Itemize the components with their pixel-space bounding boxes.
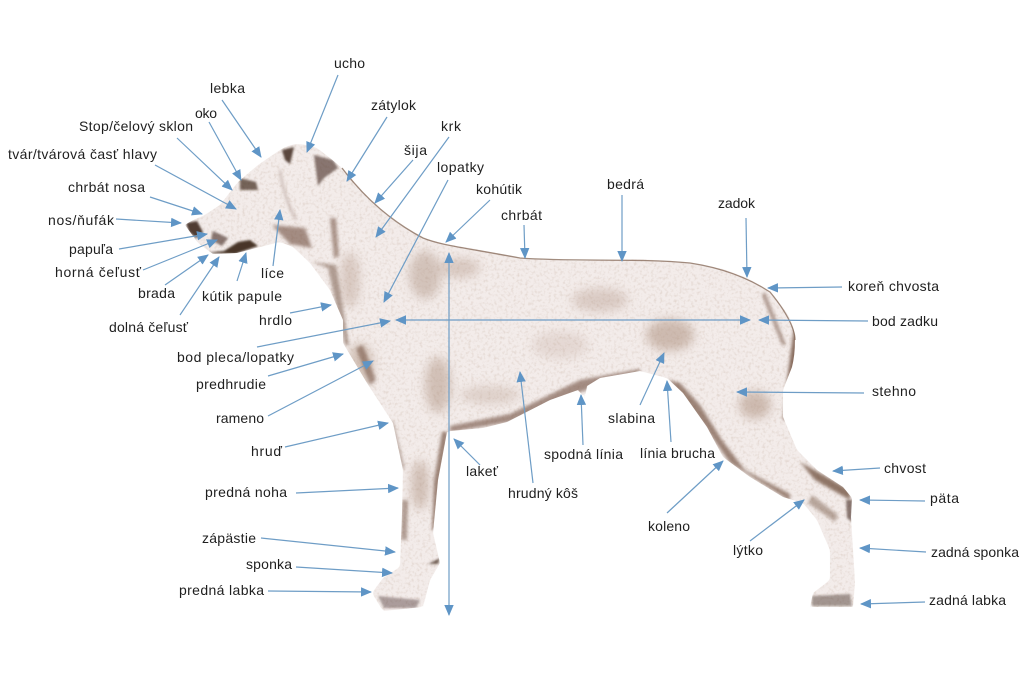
label: Stop/čelový sklon: Stop/čelový sklon — [79, 118, 193, 134]
label: Stop/čelový sklon — [79, 118, 232, 190]
label: zadná labka: zadná labka — [929, 592, 1006, 608]
label: stehno: stehno — [872, 383, 916, 399]
label: tvár/tvárová časť hlavy — [8, 146, 236, 209]
label: brada — [138, 255, 208, 301]
label: bedrá — [607, 176, 644, 261]
label: líce — [261, 210, 284, 281]
label: šija — [375, 142, 427, 203]
label: dolná čeľusť — [109, 257, 219, 335]
label: predná noha — [205, 484, 398, 500]
label: spodná línia — [544, 395, 623, 462]
label: predná labka: predná labka — [179, 582, 264, 598]
label: zátylok: zátylok — [371, 97, 417, 113]
label: dolná čeľusť: dolná čeľusť — [109, 319, 189, 335]
label: koreň chvosta: koreň chvosta — [848, 278, 939, 294]
label: slabina — [608, 353, 664, 426]
label: brada: brada — [138, 285, 175, 301]
label: nos/ňufák: nos/ňufák — [48, 212, 115, 228]
label: bod pleca/lopatky: bod pleca/lopatky — [177, 349, 294, 365]
label: rameno — [216, 361, 373, 426]
dog illustration — [170, 130, 870, 620]
label: chvost — [833, 460, 926, 476]
label: kútik papule — [202, 253, 282, 304]
label: hrudný kôš — [508, 372, 578, 501]
label: päta — [860, 490, 959, 506]
label: ucho — [307, 55, 365, 152]
label: zápästie: zápästie — [202, 530, 256, 546]
label: lýtko: lýtko — [733, 542, 763, 558]
label: bod zadku: bod zadku — [872, 313, 938, 329]
label: oko: oko — [195, 105, 217, 121]
label: lebka — [210, 80, 261, 157]
label: nos/ňufák — [48, 212, 181, 228]
label: zátylok — [347, 97, 417, 181]
label: papuľa: papuľa — [69, 241, 113, 257]
label: lakeť: lakeť — [466, 463, 499, 479]
label: hruď: hruď — [251, 443, 282, 459]
label: predhrudie — [196, 354, 343, 392]
back outline — [342, 168, 795, 340]
arrow: body length — [396, 319, 750, 321]
label: kútik papule: kútik papule — [202, 288, 282, 304]
label: hruď — [251, 423, 388, 459]
label: slabina: slabina — [608, 410, 655, 426]
label: spodná línia: spodná línia — [544, 446, 623, 462]
label: lopatky — [384, 159, 484, 302]
label: kohútik — [446, 181, 523, 242]
label: lopatky: lopatky — [437, 159, 484, 175]
label: zadok — [718, 195, 756, 277]
label: päta: päta — [930, 490, 959, 506]
label: rameno: rameno — [216, 410, 264, 426]
label: horná čeľusť: horná čeľusť — [55, 264, 142, 280]
label: chrbát: chrbát — [501, 207, 542, 223]
label: línia brucha — [640, 381, 715, 461]
label: chvost: chvost — [884, 460, 926, 476]
label: predná noha: predná noha — [205, 484, 287, 500]
label: lakeť — [454, 439, 499, 479]
label: zadok: zadok — [718, 195, 756, 211]
label: papuľa — [69, 234, 207, 257]
label: koleno — [648, 461, 723, 534]
label: zápästie — [202, 530, 395, 552]
label: zadná sponka: zadná sponka — [931, 544, 1019, 560]
label: šija: šija — [404, 142, 427, 158]
label: horná čeľusť — [55, 240, 217, 280]
label: sponka: sponka — [246, 556, 292, 572]
label: hrdlo — [259, 305, 331, 328]
label: koleno: koleno — [648, 518, 690, 534]
label: bedrá: bedrá — [607, 176, 644, 192]
label: lýtko — [733, 500, 804, 558]
label: oko — [195, 105, 241, 180]
label: líce: líce — [261, 265, 284, 281]
label: chrbát nosa — [68, 179, 202, 214]
label: bod pleca/lopatky — [177, 321, 390, 365]
label: predhrudie: predhrudie — [196, 376, 266, 392]
label: sponka — [246, 556, 392, 573]
label: hrudný kôš: hrudný kôš — [508, 485, 578, 501]
coat shading — [170, 130, 870, 620]
label: chrbát — [501, 207, 542, 258]
label: ucho: ucho — [334, 55, 365, 71]
arrow: height at withers — [448, 253, 450, 615]
label: chrbát nosa: chrbát nosa — [68, 179, 145, 195]
label: tvár/tvárová časť hlavy: tvár/tvárová časť hlavy — [8, 146, 157, 162]
dog body silhouette — [185, 144, 855, 611]
label: línia brucha: línia brucha — [640, 445, 715, 461]
label: krk — [376, 118, 462, 237]
label: krk: krk — [441, 118, 462, 134]
label: lebka: lebka — [210, 80, 245, 96]
label: hrdlo: hrdlo — [259, 312, 292, 328]
label: kohútik: kohútik — [476, 181, 523, 197]
label: zadná sponka — [860, 544, 1019, 560]
